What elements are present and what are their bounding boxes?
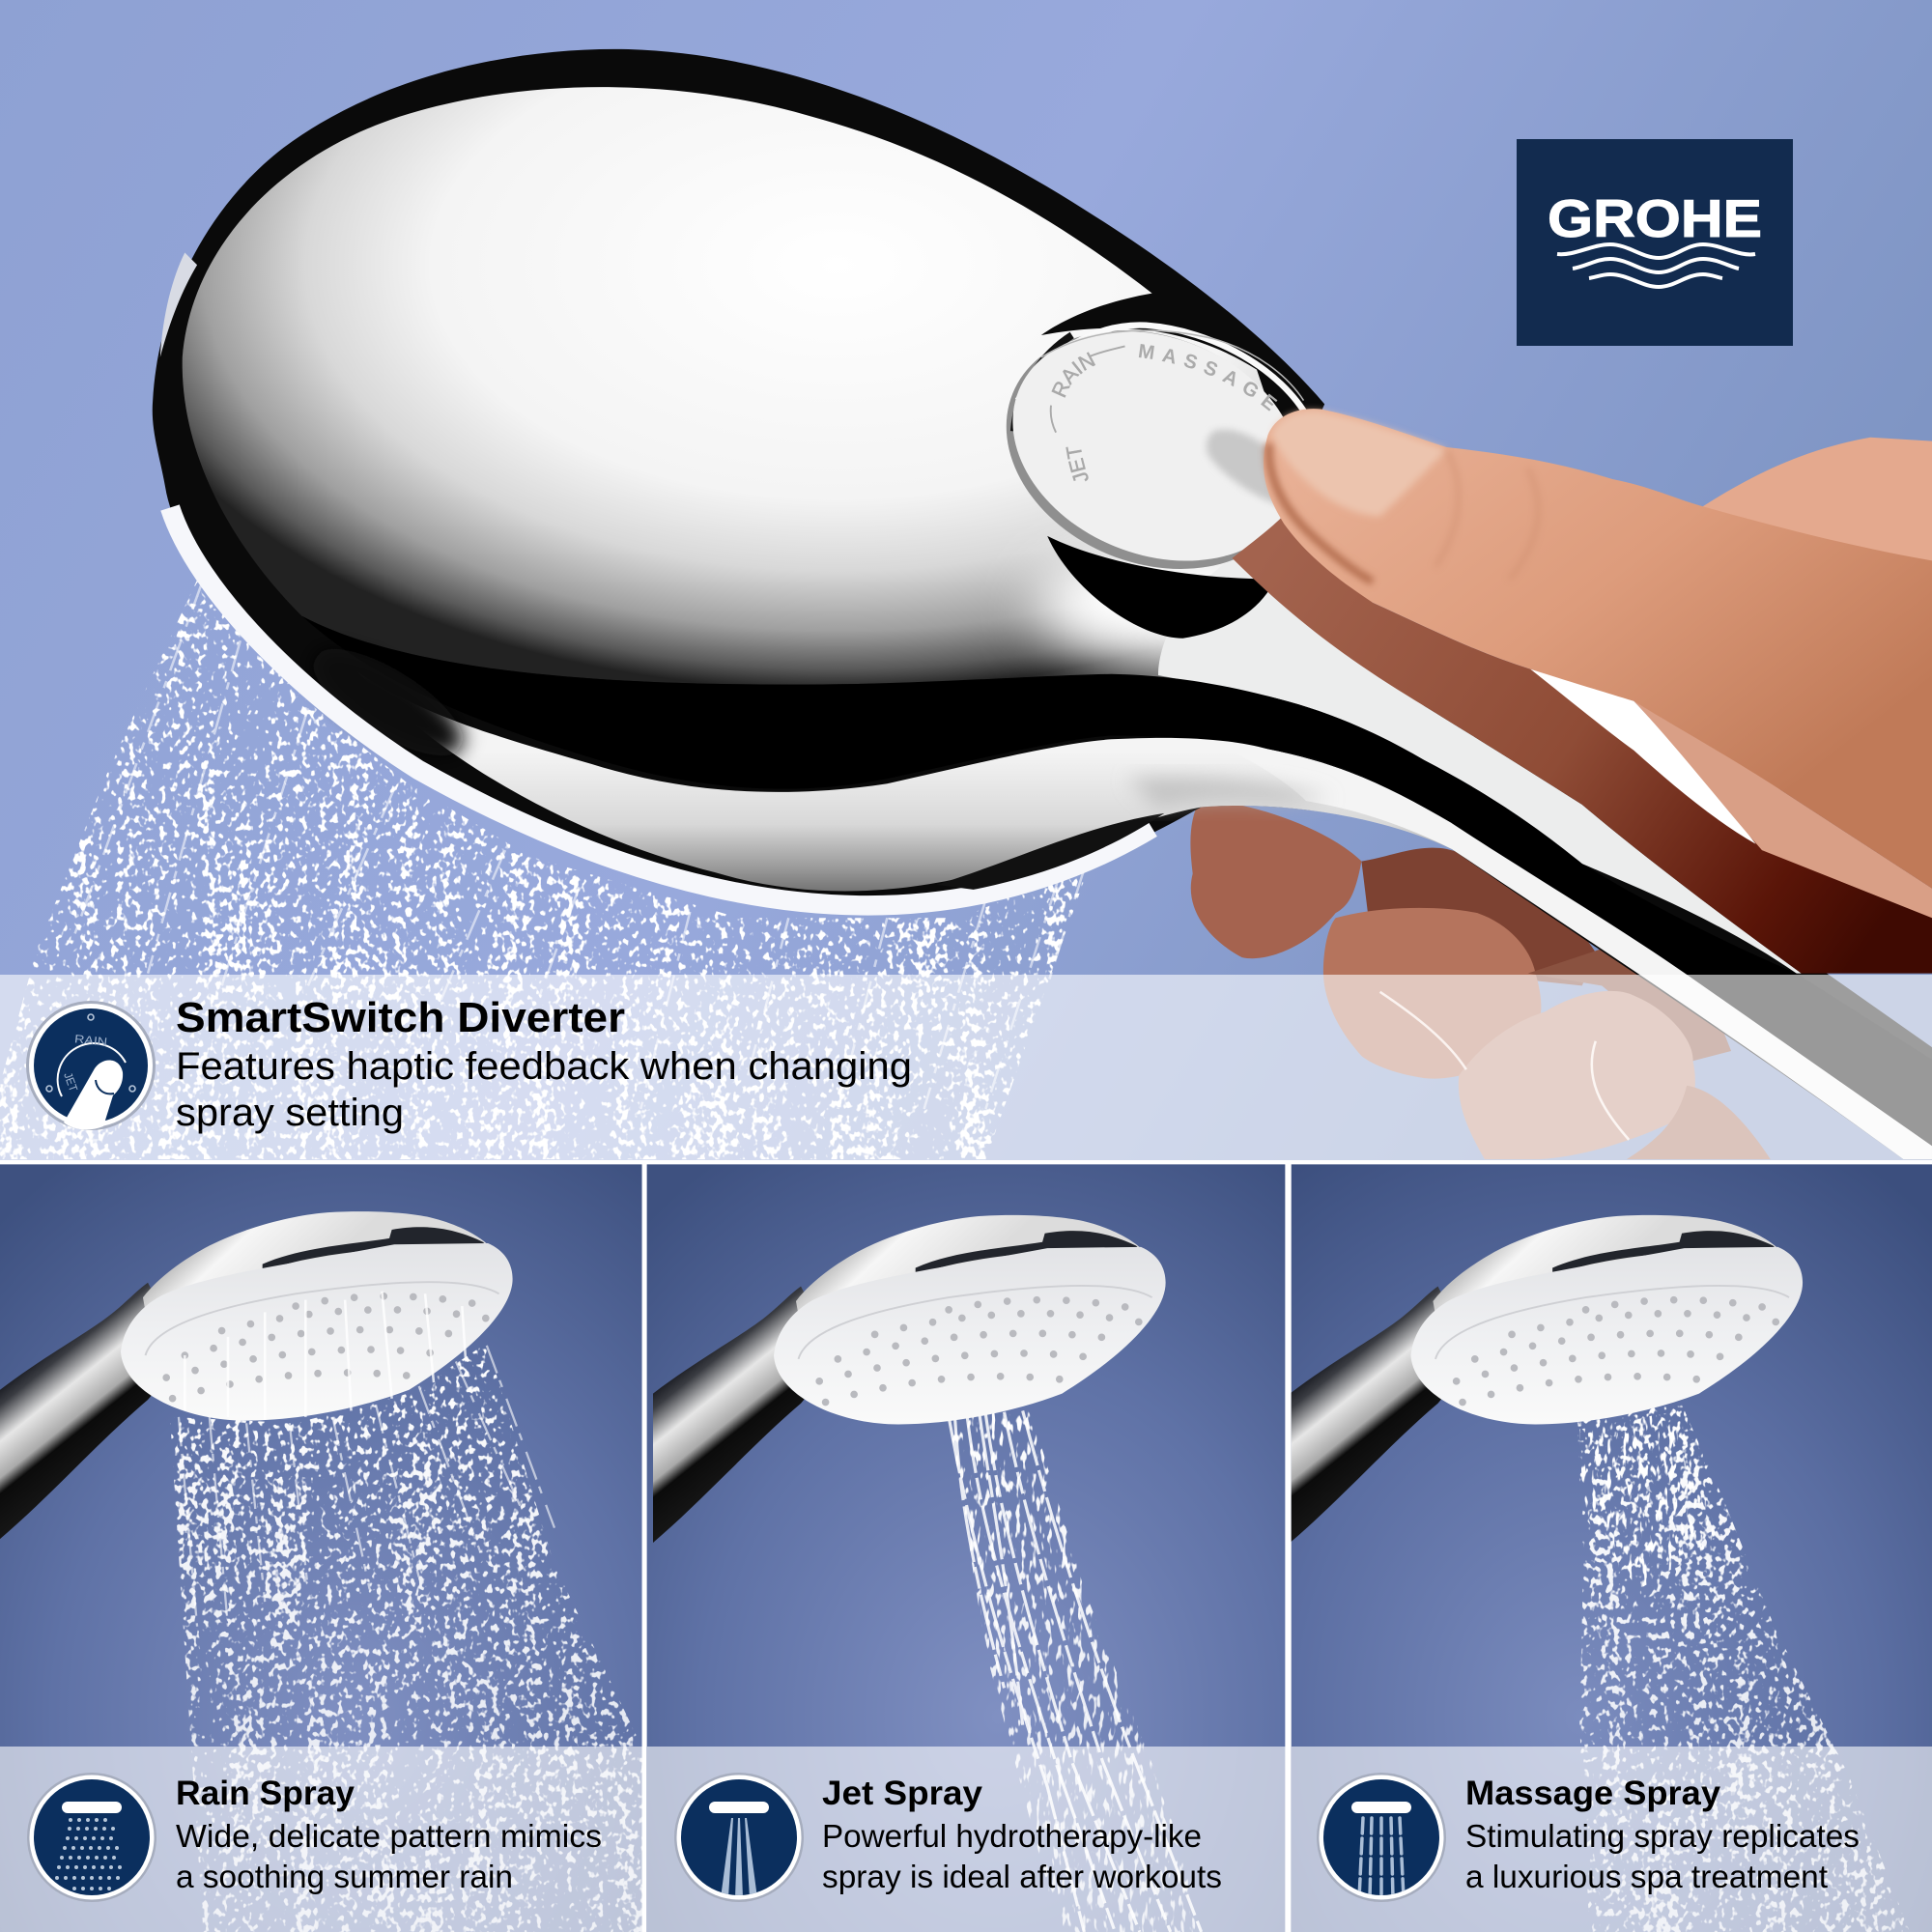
icon: massage spray [1317,1773,1446,1902]
knob labels: JET [1065,446,1089,481]
panel: Massage Spray [1290,1164,1932,1932]
white lower rim [170,508,1152,905]
callout band: Rain [0,1747,642,1932]
hand [1233,409,1932,974]
callout band: Jet [647,1747,1286,1932]
text: SmartSwitch description: spray setting [176,1092,404,1134]
icon: SmartSwitch dial: RAIN [73,1032,108,1049]
callout band: SmartSwitch [0,975,1932,1160]
knob labels: RAIN [1051,352,1095,398]
text: Jet description: spray is ideal after workouts [822,1859,1222,1894]
handle underside shade [1127,777,1331,809]
icon: SmartSwitch dial: JET [61,1070,80,1094]
icon: rain spray [27,1773,156,1902]
lower chrome [419,707,1451,891]
text: Jet description [822,1818,1222,1894]
showerhead body [153,49,1932,1159]
heading: Jet Spray: Jet Spray [822,1775,983,1812]
text: SmartSwitch description: Features haptic feedback when changing [176,1045,912,1088]
text: Massage description: Stimulating spray replicates [1465,1818,1860,1854]
text: Massage description: a luxurious spa treatment [1465,1859,1828,1894]
heading: Rain Spray: Rain Spray [176,1775,355,1812]
water spray [0,567,1091,1159]
spray and head: massage [1290,1215,1910,1932]
text: Rain description: Wide, delicate pattern mimics [176,1818,602,1854]
handle white edge [1213,741,1932,1159]
knob labels: MASSAGE [1138,344,1277,412]
handle silver strip [1158,558,1802,974]
background [0,1164,642,1932]
chrome left falloff [336,651,479,763]
logo: GROHE [1517,139,1793,346]
spray and head: rain [0,1211,643,1932]
background [1292,1164,1932,1932]
heading: SmartSwitch Diverter: SmartSwitch Diverter [176,994,625,1041]
text: Rain description [176,1818,602,1894]
hero illustration [0,48,1932,1159]
spray and head: jet [653,1215,1202,1932]
text: Massage description [1465,1818,1860,1894]
black reflection band [302,616,1798,975]
icon: jet spray [674,1773,804,1902]
panel: Rain Spray [0,1164,643,1932]
callout band: Massage [1292,1747,1932,1932]
panel: Jet Spray [647,1164,1286,1932]
hero background [0,0,1932,1160]
panel: hero [0,0,1932,1160]
heading: Massage Spray: Massage Spray [1465,1775,1721,1812]
knob recess [1047,536,1275,639]
text: SmartSwitch description [176,1045,912,1134]
diverter knob [1007,322,1306,569]
chrome dome [182,87,1264,684]
text: Jet description: Powerful hydrotherapy-like [822,1818,1202,1854]
icon: SmartSwitch dial [26,1001,156,1130]
under-head shadow [936,813,1164,890]
knob labels [1051,344,1277,481]
text: Rain description: a soothing summer rain [176,1859,513,1894]
logo: GROHE: GROHE [1548,188,1762,248]
lower fingers [1190,800,1771,1159]
background [647,1164,1285,1932]
